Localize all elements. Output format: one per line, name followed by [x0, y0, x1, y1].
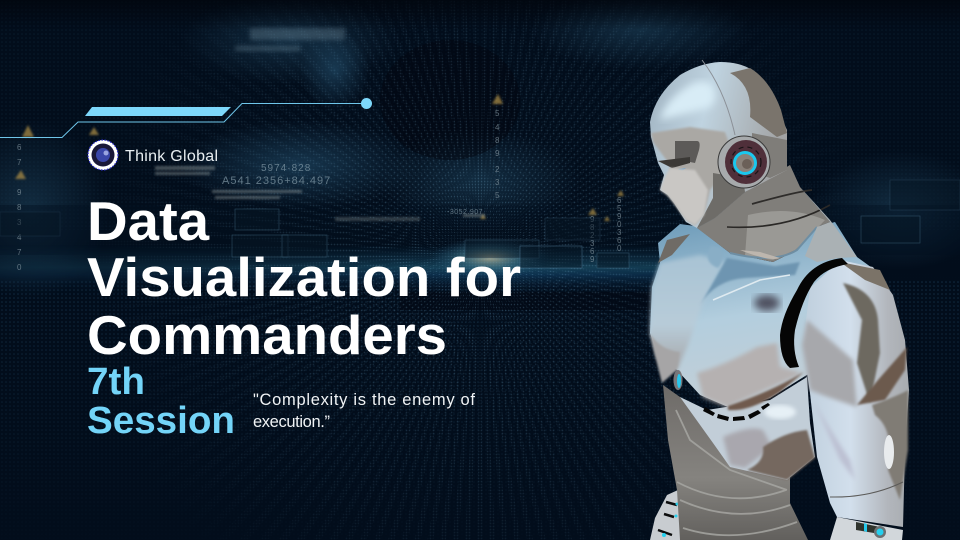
- android upper arm: [803, 260, 909, 527]
- readout columns: 3: [590, 239, 595, 248]
- dot: connector end: [361, 98, 372, 109]
- logo: Think Global seal: [88, 140, 118, 170]
- readout columns: 9: [617, 212, 622, 221]
- readout columns: 6: [617, 236, 622, 245]
- android neck highlights: [727, 190, 830, 260]
- line: circuit connector: [0, 104, 366, 138]
- android abdomen lines: [676, 410, 797, 535]
- android abdomen center plate: [680, 377, 815, 480]
- android torso: [663, 385, 808, 540]
- android neck: [697, 165, 830, 262]
- head highlights: [651, 60, 787, 228]
- android head: [650, 62, 787, 228]
- readout columns: 8: [590, 223, 595, 232]
- readout columns: 2: [590, 231, 595, 240]
- session number: 7th: [87, 361, 145, 403]
- quote line 1: "Complexity is the enemy of: [253, 391, 475, 409]
- readout columns: [17, 109, 622, 272]
- readout columns: 6: [17, 143, 22, 152]
- readout columns: 0: [617, 244, 622, 253]
- hud data panels: [0, 180, 960, 268]
- readout: long numbers: A541 2356+84.497: [222, 175, 331, 187]
- session word: Session: [87, 400, 235, 442]
- readout columns: 5: [495, 109, 500, 118]
- quote: [253, 391, 475, 431]
- arm strap: [780, 258, 848, 368]
- chest side light: [674, 370, 682, 390]
- illustration: silver android: [650, 60, 909, 540]
- trapezius plate: [800, 187, 857, 262]
- android earpiece with cyan ring: [718, 136, 770, 188]
- hud bars: [155, 166, 485, 221]
- arm details: [802, 262, 908, 500]
- android chest and shoulders: [650, 222, 893, 410]
- readout columns: 8: [17, 203, 22, 212]
- readout columns: 3: [495, 178, 500, 187]
- android left forearm and hand: [650, 490, 682, 540]
- android brow: [658, 141, 700, 171]
- readout: numbers: 5974·828: [261, 163, 311, 174]
- header ornament: [0, 98, 372, 138]
- readout columns: 6: [617, 196, 622, 205]
- session label: [87, 361, 235, 442]
- android face: [660, 168, 708, 225]
- shoulder strip dark: [658, 234, 690, 263]
- readout columns: 7: [17, 248, 22, 257]
- readout columns: 8: [495, 136, 500, 145]
- readout columns: 7: [17, 158, 22, 167]
- title line 3: Commanders: [87, 304, 447, 366]
- bar: accent parallelogram: [85, 107, 231, 116]
- brand name: Think Global: [125, 148, 218, 165]
- title: [87, 190, 521, 366]
- warning triangles: [15, 94, 624, 221]
- readout columns: 9: [590, 255, 595, 264]
- title line 2: Visualization for: [87, 246, 521, 308]
- readout columns: 4: [495, 123, 500, 132]
- blurred top readout: [235, 28, 345, 51]
- background readouts: [222, 163, 483, 216]
- readout columns: 3: [17, 218, 22, 227]
- abdomen patches: [723, 405, 815, 480]
- chest shading: [650, 246, 804, 410]
- readout columns: 0: [617, 220, 622, 229]
- readout columns: 9: [495, 149, 500, 158]
- readout columns: 2: [495, 165, 500, 174]
- readout columns: 6: [590, 247, 595, 256]
- left pectoral: [650, 255, 725, 370]
- android wrist: [830, 517, 903, 540]
- readout columns: 9: [17, 188, 22, 197]
- quote line 2: execution.”: [253, 413, 330, 431]
- readout columns: 9: [590, 215, 595, 224]
- readout columns: 5: [495, 191, 500, 200]
- title line 1: Data: [87, 190, 209, 252]
- readout columns: 4: [17, 233, 22, 242]
- chest light bar: [703, 403, 770, 421]
- readout: small numbers: -3052.907: [447, 209, 483, 216]
- readout columns: 5: [617, 204, 622, 213]
- readout columns: 3: [617, 228, 622, 237]
- readout columns: 0: [17, 263, 22, 272]
